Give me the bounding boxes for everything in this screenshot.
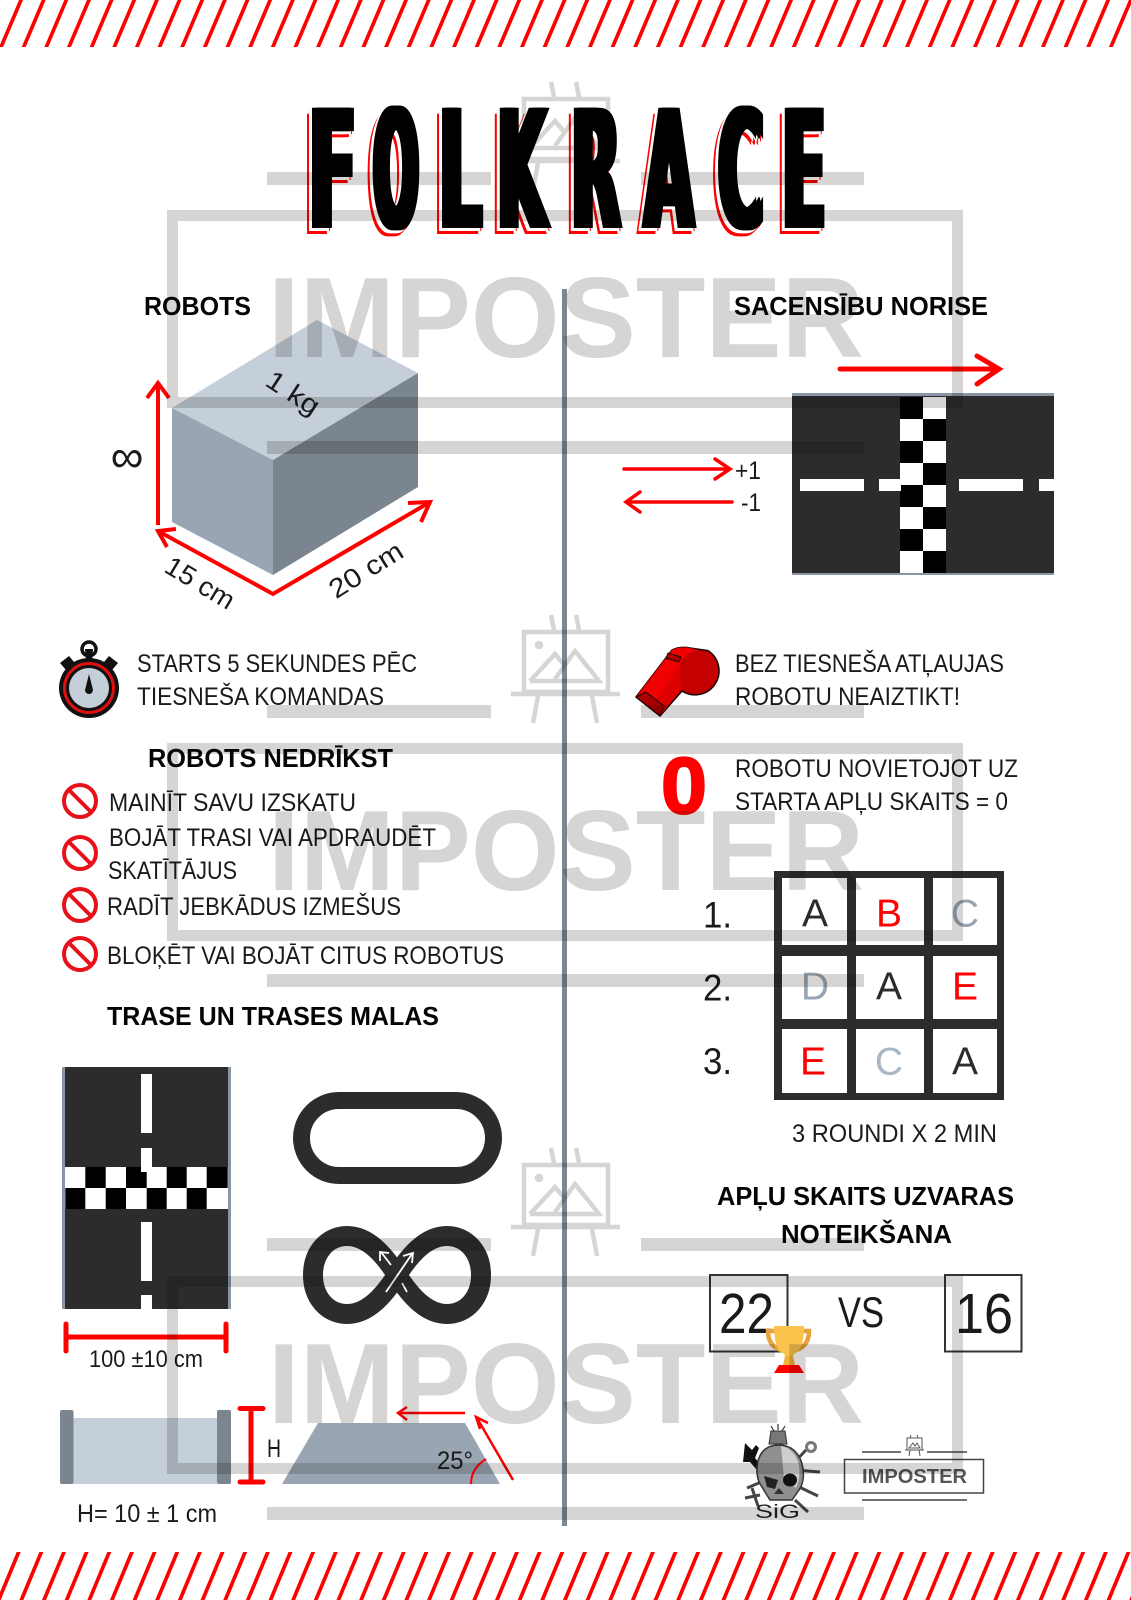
heading: robot must not: ROBOTS NEDRĪKST [148,743,393,773]
icon: whistle [636,647,719,716]
title: K [494,75,545,267]
table: rounds: A [952,1040,978,1084]
panel: vertical track [62,1067,231,1309]
text: prohibition 2: SKATĪTĀJUS [108,857,237,885]
panel: horizontal track [792,393,1054,575]
text: rounds and time: 3 ROUNDI X 2 MIN [792,1120,997,1148]
title: A [641,75,690,267]
logo frame [844,1460,984,1493]
icon: prohibited 4 [64,938,96,970]
watermark block 2 [172,615,958,987]
logo: SiG skull [743,1424,820,1523]
icon: prohibited 3 [64,889,96,921]
table: rounds [774,871,1004,1100]
table: rounds: C [875,1040,903,1084]
title: O [370,75,415,267]
heading: competition: SACENSĪBU NORISE [734,291,988,321]
label: H: H [267,1435,281,1463]
score box: 22 [710,1275,788,1352]
text: E [779,75,822,267]
heading: robots: ROBOTS [144,291,251,321]
top stripe band [0,0,1131,47]
label: angle: 25° [437,1447,473,1475]
arrow: plus one lap [624,459,730,479]
icon: prohibited 2 [64,837,96,869]
icon: prohibited 1 [64,785,96,817]
arrow: height [147,383,169,525]
icon: stopwatch [59,642,119,718]
title: C [715,75,760,267]
dimension: track width [66,1324,226,1351]
table: rounds: A [876,966,902,1008]
text: start lap count: STARTA APĻU SKAITS = 0 [735,788,1008,816]
text: start lap count: ROBOTU NOVIETOJOT UZ [735,755,1018,783]
labels: round numbers: 2. [703,968,732,1008]
heading: victory: NOTEIKŠANA [781,1219,952,1249]
watermark block 3 [172,1148,958,1520]
label: barrier height value: H= 10 ± 1 cm [77,1500,217,1528]
text: versus: VS [838,1289,884,1337]
text: start lap count [735,755,1018,816]
label: length: 15 cm [160,551,240,615]
label: plus one: +1 [735,457,761,485]
panel: robot dimensions box [111,320,430,615]
arrow: ramp top [398,1407,465,1420]
logo text: IMPOSTER [862,1466,968,1488]
text: do not touch rule: ROBOTU NEAIZTIKT! [735,683,960,711]
arrows: width and length [158,502,430,594]
score box: 16 [945,1275,1022,1352]
table: rounds: B [876,892,902,936]
heading: victory [717,1181,1014,1249]
table: rounds: E [952,966,978,1008]
arrow: race direction [840,356,999,384]
text: do not touch rule: BEZ TIESNEŠA ATĻAUJAS [735,649,1004,678]
list: prohibitions [64,785,504,970]
arrow: ramp slope [476,1417,513,1480]
title: L [436,75,478,267]
icon: track edge barrier [60,1410,231,1484]
icon: oval track [302,1100,494,1176]
watermark block 3: IMPOSTER [268,1321,864,1448]
centre divider [562,289,567,1526]
icon: box [172,320,418,575]
watermark block 1 [172,82,958,454]
big zero: 0 [661,741,707,830]
text: start rule: STARTS 5 SEKUNDES PĒC [137,650,417,678]
table: rounds: E [800,1040,826,1084]
labels: round numbers: 1. [703,894,732,936]
text: prohibition 4: BLOĶĒT VAI BOJĀT CITUS ROBOTUS [107,942,504,970]
label: weight: 1 kg [261,365,325,421]
labels: round numbers: 3. [703,1041,732,1082]
table: rounds: A [802,892,828,936]
logo: Imposter [844,1435,984,1500]
heading: track and edges: TRASE UN TRASES MALAS [107,1001,439,1031]
dimension: barrier height [240,1408,263,1482]
heading: victory: APĻU SKAITS UZVARAS [717,1181,1014,1211]
score box: 16: 16 [955,1282,1013,1346]
icon: figure eight track [313,1236,481,1314]
table: rounds: C [951,892,979,936]
arrow: minus one lap [626,492,732,512]
score box: 22: 22 [719,1282,774,1346]
label: track width: 100 ±10 cm [89,1346,203,1373]
text: prohibition 2 [108,824,436,885]
text: prohibition 3: RADĪT JEBKĀDUS IZMEŠUS [107,892,401,921]
bottom stripe band [0,1552,1131,1600]
watermark block 2: IMPOSTER [268,788,864,915]
icon: small easel [905,1435,924,1456]
watermark easel 1 [511,82,620,190]
text: start rule [137,650,417,711]
angle arc [471,1459,486,1484]
icon: trophy [768,1326,809,1373]
title: R [568,75,617,267]
label: minus one: -1 [741,489,761,517]
text: do not touch rule [735,649,1004,711]
text: prohibition 2: BOJĀT TRASI VAI APDRAUDĒT [109,824,436,852]
logo: SiG skull: SiG [755,1502,800,1523]
label: infinite height: ∞ [111,430,143,482]
watermark block 1: IMPOSTER [268,255,864,382]
background watermark [172,82,958,1520]
table: rounds: D [801,966,829,1008]
watermark easel 3 [511,1148,620,1256]
text: prohibition 1: MAINĪT SAVU IZSKATU [109,789,356,817]
title: F [306,75,353,267]
icon: ramp profile [282,1423,500,1484]
logo rules [862,1452,967,1500]
label: width: 20 cm [323,536,409,604]
title [306,75,822,267]
text: start rule: TIESNEŠA KOMANDAS [137,682,384,711]
labels: round numbers [703,894,732,1082]
watermark easel 2 [511,615,620,723]
